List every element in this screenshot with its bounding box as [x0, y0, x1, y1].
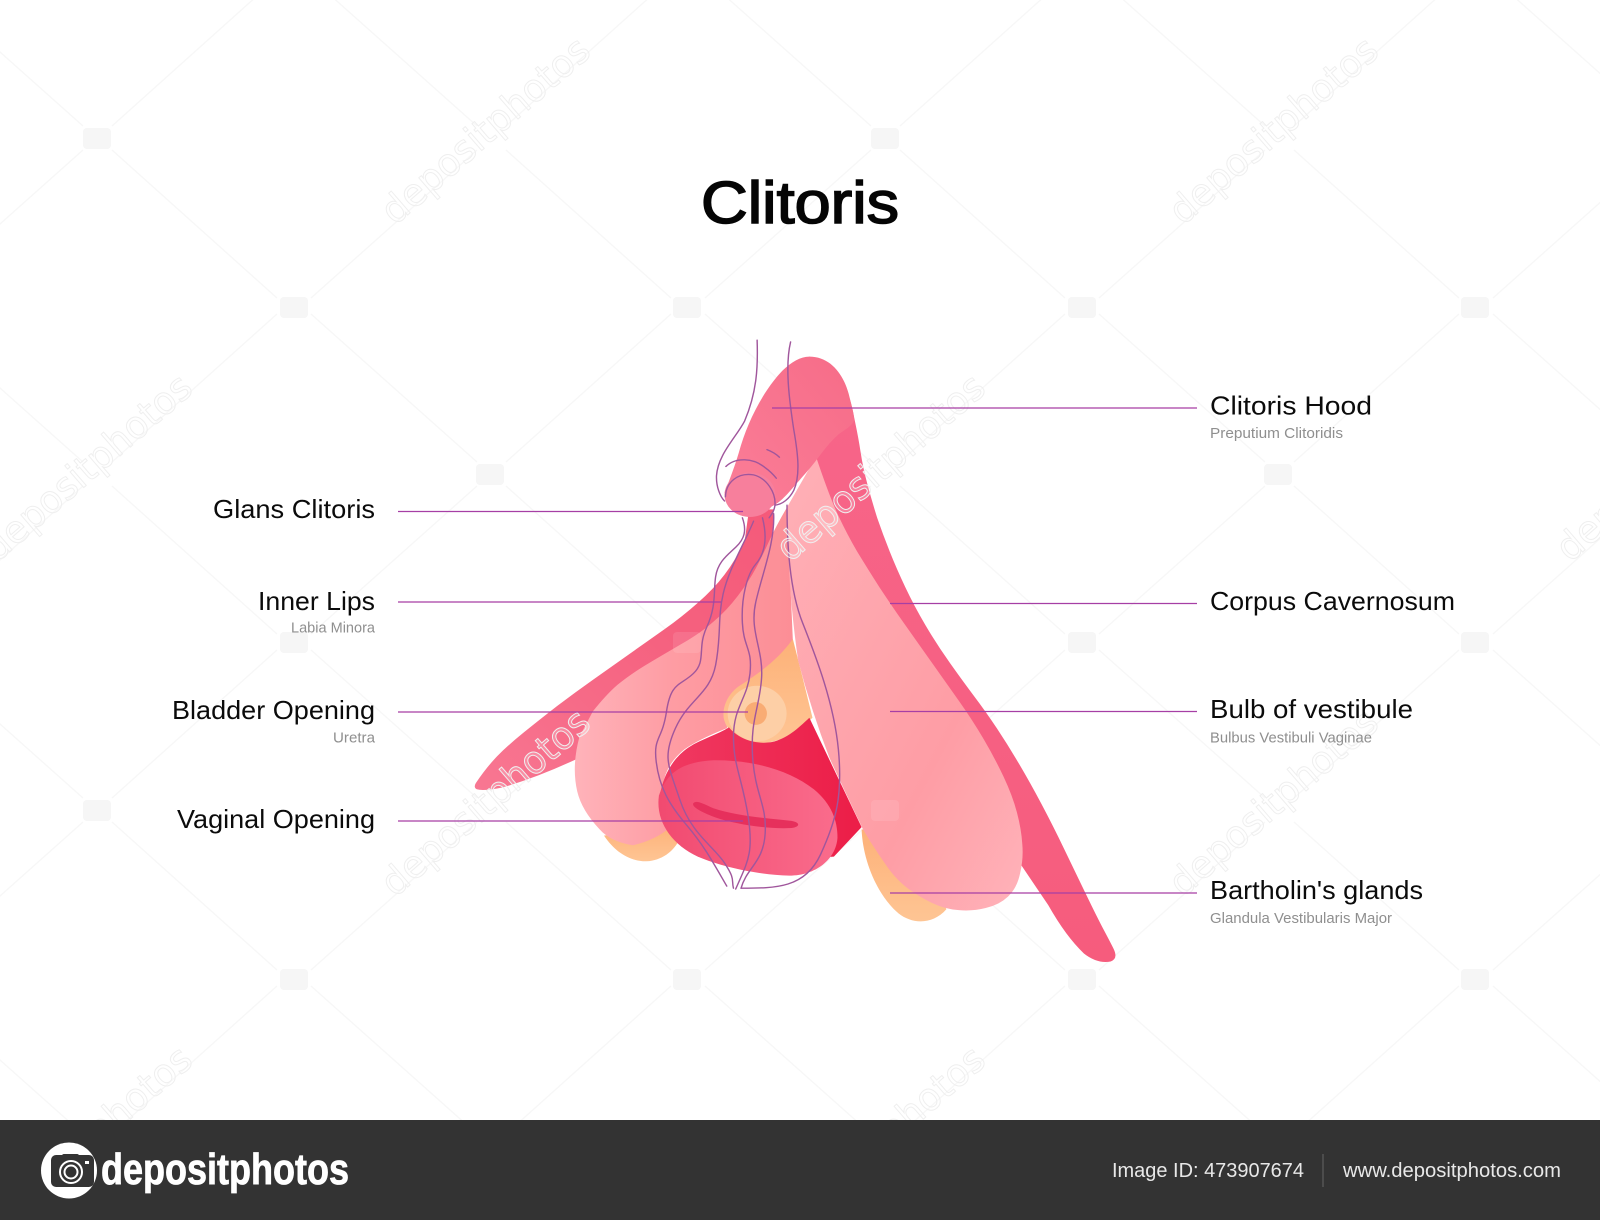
footer website: www.depositphotos.com: [1342, 1160, 1561, 1182]
label: Vaginal Opening: Vaginal Opening: [177, 804, 375, 834]
label: Bladder Opening: Bladder Opening: [172, 695, 375, 725]
label: Clitoris Hood: Preputium Clitoridis: [1210, 426, 1343, 442]
label: Bartholin's glands: Bartholin's glands: [1210, 875, 1423, 905]
left Bartholin's gland: [604, 825, 679, 861]
watermark text: depositphotos: [372, 700, 599, 905]
label: Bladder Opening: [172, 695, 376, 746]
footer divider: [1322, 1154, 1324, 1187]
footer logo wordmark: depositphotos: [101, 1145, 349, 1194]
leader line: vaginal opening: [398, 820, 743, 822]
leader line: inner lips: [398, 601, 721, 603]
vaginal slit: [693, 802, 798, 828]
label: Inner Lips: Labia Minora: [291, 620, 376, 636]
right bulb of vestibule: [787, 457, 1023, 910]
label: Bartholin's glands: Glandula Vestibularis Major: [1210, 911, 1392, 927]
watermark camera marks: [83, 128, 1489, 990]
label: Corpus Cavernosum: Corpus Cavernosum: [1210, 586, 1455, 616]
glans clitoris: [725, 472, 775, 517]
vestibule area: [723, 639, 812, 743]
anatomy diagram: [475, 340, 1115, 962]
label: Inner Lips: [258, 586, 376, 636]
watermark text: depositphotos: [1160, 28, 1387, 233]
label: Bladder Opening: Uretra: [333, 730, 376, 746]
label: Bulb of vestibule: Bulb of vestibule: [1210, 694, 1413, 724]
watermark camera marks over anatomy: [673, 632, 899, 821]
leader line: corpus cavernosum: [890, 602, 1197, 604]
footer image id: Image ID: 473907674: [1112, 1160, 1304, 1182]
vaginal canal: [660, 718, 862, 863]
right Bartholin's gland: [862, 829, 946, 921]
watermark text: depositphotos: [372, 28, 599, 233]
label: Bulb of vestibule: [1210, 694, 1413, 746]
icon: footer camera logo: [41, 1142, 97, 1198]
watermark text: depositphotos: [767, 365, 994, 570]
title: Clitoris: [701, 170, 899, 236]
urethra centre: [745, 702, 767, 725]
vaginal opening: [658, 760, 837, 876]
right crus of corpus cavernosum: [803, 357, 1115, 962]
label: Bartholin's glands: [1210, 875, 1423, 927]
leader line: bulb of vestibule: [890, 710, 1197, 712]
leader line: Bartholin's glands: [890, 892, 1197, 894]
left bulb of vestibule: [575, 507, 793, 845]
leader line: glans clitoris: [398, 510, 743, 512]
label: Inner Lips: Inner Lips: [258, 586, 375, 616]
bladder opening: [728, 686, 787, 741]
footer bar: [0, 1120, 1600, 1220]
inner lips outlines: [656, 340, 840, 889]
leader line: bladder opening: [398, 711, 748, 713]
label: Clitoris Hood: [1210, 390, 1372, 442]
label: Glans Clitoris: Glans Clitoris: [213, 494, 375, 524]
left crus of corpus cavernosum: [475, 509, 774, 790]
watermark text: depositphotos: [1160, 700, 1387, 905]
leader line: clitoris hood: [772, 407, 1197, 409]
label: Clitoris Hood: Clitoris Hood: [1210, 390, 1372, 420]
label: Bulb of vestibule: Bulbus Vestibuli Vaginae: [1210, 730, 1372, 746]
clitoris hood: [725, 357, 854, 512]
